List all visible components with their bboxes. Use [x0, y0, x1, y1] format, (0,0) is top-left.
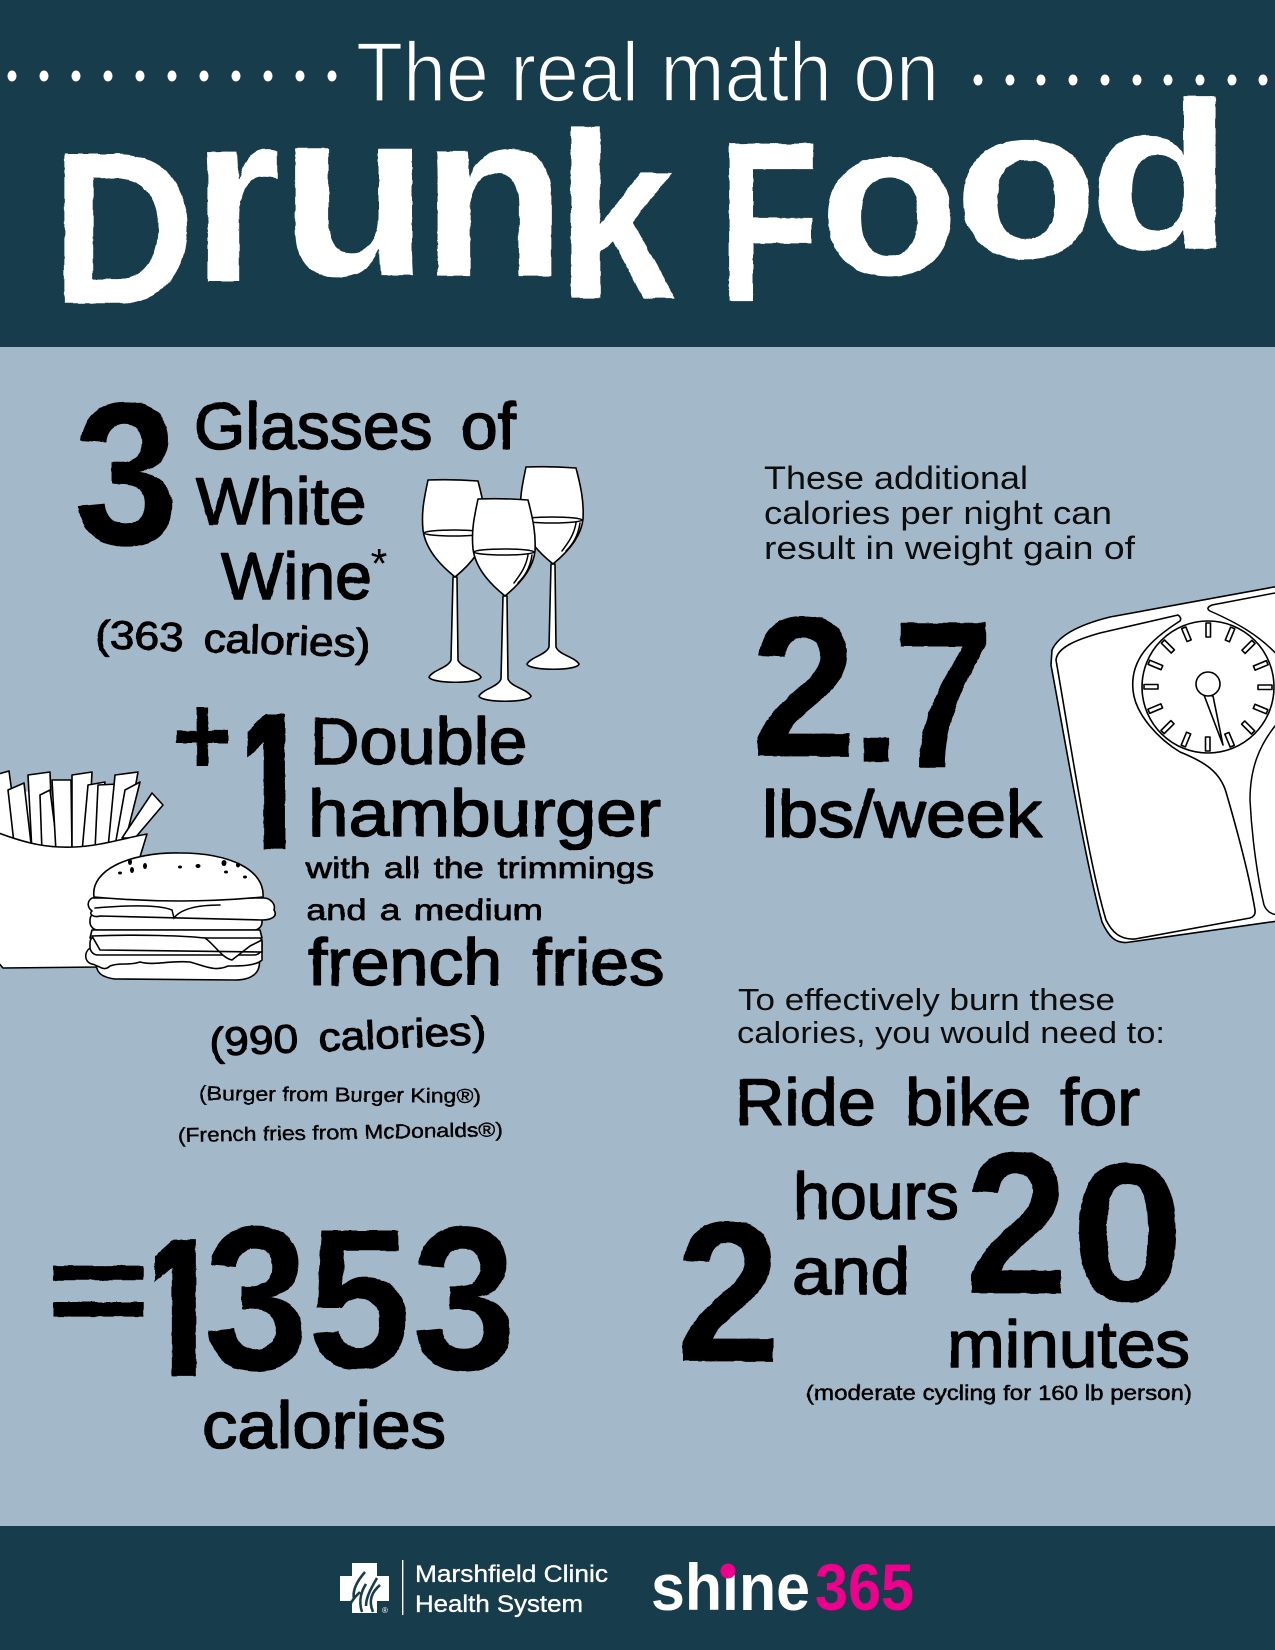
big number 20 minutes: 0	[1071, 1123, 1184, 1344]
dial ticks	[1144, 623, 1272, 751]
fries	[0, 771, 163, 852]
title: Drunk Food: D	[51, 108, 195, 351]
lower lettuce	[86, 948, 262, 969]
big number 20 minutes	[965, 1111, 1184, 1344]
plus one: 1	[228, 663, 314, 932]
scale body	[1051, 585, 1275, 943]
big number 20 minutes: 2	[965, 1111, 1068, 1338]
calories label: calories	[202, 1388, 446, 1462]
wine text block: White	[196, 464, 366, 538]
total: =1353: =	[46, 1215, 151, 1366]
total: =1353: 3	[204, 1185, 309, 1415]
icon: wine glasses	[422, 467, 583, 701]
total: =1353	[46, 1185, 517, 1415]
dial face	[1142, 621, 1274, 753]
burger text block: (Burger from Burger King®)	[199, 1083, 481, 1108]
total: =1353: 5	[308, 1189, 411, 1411]
icon: bathroom scale	[1051, 585, 1275, 943]
lower patty	[90, 935, 262, 955]
footer band	[0, 1526, 1275, 1650]
title: Drunk Food: n	[421, 64, 566, 328]
logo: shine365	[651, 1550, 914, 1624]
burger text block: (French fries from McDonalds®)	[178, 1119, 503, 1147]
registered mark: ®	[382, 1606, 388, 1615]
wheat marks	[350, 1572, 380, 1612]
cross mark	[340, 1563, 389, 1613]
wine text block: Glasses of	[194, 389, 517, 463]
burn intro text	[737, 982, 1165, 1050]
sesame seeds	[118, 859, 247, 878]
upper lettuce and cheese	[88, 898, 275, 920]
wine text block	[95, 389, 517, 666]
burn intro text: calories, you would need to:	[737, 1015, 1165, 1050]
burger text block: and a medium	[306, 894, 543, 927]
cycling text block: Ride bike for	[735, 1065, 1140, 1139]
burger text block: hamburger	[308, 776, 661, 850]
title: Drunk Food: o	[819, 78, 960, 323]
weight gain intro text: These additional	[764, 460, 1028, 496]
wine text block: (363 calories)	[95, 613, 371, 666]
cycling text block: minutes	[947, 1307, 1190, 1381]
logo: shine365: shine	[651, 1550, 810, 1624]
big number 3: 3	[74, 361, 179, 590]
title: Drunk Food: o	[954, 61, 1098, 306]
title: Drunk Food: F	[718, 95, 819, 352]
upper patty	[90, 912, 262, 930]
title: Drunk Food: d	[1089, 60, 1232, 295]
logo: Marshfield Clinic	[340, 1560, 608, 1618]
dotted line left of subtitle	[8, 70, 336, 82]
burger text block: (990 calories)	[208, 1009, 487, 1065]
weight gain intro text	[764, 460, 1135, 566]
cycling text block: (moderate cycling for 160 lb person)	[806, 1382, 1192, 1405]
left glass	[422, 480, 485, 682]
icon: french fries	[0, 771, 163, 968]
cycling text block: hours	[793, 1159, 959, 1233]
big number 2 hours: 2	[676, 1181, 781, 1406]
top bun	[94, 853, 263, 901]
logo divider	[402, 1560, 403, 1615]
header band	[0, 0, 1275, 347]
big number 2.7: 7	[893, 579, 994, 814]
weight gain intro text: calories per night can	[764, 495, 1112, 531]
weight gain intro text: result in weight gain of	[764, 530, 1135, 566]
subtitle: The real math on	[356, 25, 939, 119]
right glass	[520, 467, 583, 669]
wine text block: Wine	[221, 539, 372, 613]
bottom bun	[96, 958, 259, 980]
burger text block: with all the trimmings	[305, 852, 654, 885]
plus one	[172, 672, 286, 850]
logo: Marshfield Clinic: Health System	[415, 1591, 583, 1618]
dotted line right of subtitle	[974, 74, 1268, 86]
burn intro text: To effectively burn these	[738, 982, 1115, 1017]
burger text block: Double	[310, 704, 527, 778]
cycling text block	[735, 1065, 1192, 1405]
fries carton	[0, 832, 147, 968]
wordmark: Marshfield Clinic	[415, 1561, 608, 1588]
title: Drunk Food: r	[192, 61, 281, 335]
burger text block: french fries	[308, 925, 664, 999]
left pane	[1056, 615, 1255, 939]
wine text block: *	[371, 540, 387, 587]
needle	[1204, 695, 1223, 745]
title: Drunk Food	[51, 59, 1232, 352]
big number 2.7	[751, 576, 994, 814]
cycling text block: and	[792, 1234, 910, 1308]
right pane lines	[1208, 592, 1275, 915]
logo: shine365: 365	[815, 1550, 914, 1624]
big number 2.7: 2	[751, 576, 857, 801]
burger text block	[178, 704, 664, 1147]
plus one: +	[172, 672, 233, 801]
title: Drunk Food: k	[556, 85, 675, 351]
title: Drunk Food: u	[280, 59, 429, 328]
lbs per week label: lbs/week	[762, 777, 1043, 851]
icon: double hamburger	[86, 853, 275, 980]
fries backing	[0, 790, 128, 850]
front glass	[472, 499, 535, 701]
big number 2.7: .	[851, 618, 901, 797]
total: =1353: 1	[131, 1189, 228, 1460]
total: =1353: 3	[412, 1185, 517, 1415]
